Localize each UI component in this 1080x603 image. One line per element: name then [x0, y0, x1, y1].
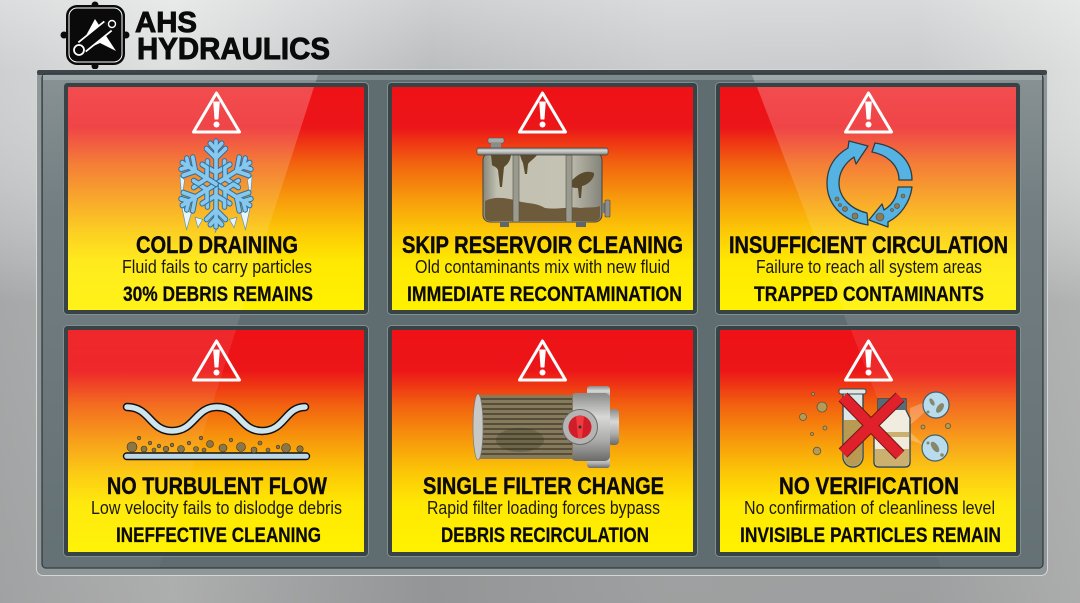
consequence: TRAPPED CONTAMINANTS — [754, 283, 984, 306]
heading: NO TURBULENT FLOW — [107, 473, 327, 500]
description: Failure to reach all system areas — [756, 257, 982, 277]
description: Old contaminants mix with new fluid — [415, 257, 670, 277]
panel: skip reservoir cleaning — [388, 82, 698, 314]
icon: warning triangle — [520, 341, 566, 380]
heading: SKIP RESERVOIR CLEANING — [402, 232, 683, 259]
description: Rapid filter loading forces bypass — [427, 498, 660, 518]
heading: COLD DRAINING — [136, 232, 298, 259]
logo wordmark: AHS — [135, 7, 197, 39]
consequence: INEFFECTIVE CLEANING — [116, 524, 321, 547]
heading: SINGLE FILTER CHANGE — [423, 473, 664, 500]
icon: warning triangle — [846, 93, 892, 132]
icon: warning triangle — [194, 341, 240, 380]
icon: clogged filter with bypass gauge — [473, 386, 619, 468]
heading: NO VERIFICATION — [779, 473, 959, 500]
panel: insufficient circulation — [716, 82, 1020, 314]
consequence: DEBRIS RECIRCULATION — [441, 524, 649, 547]
icon: warning triangle — [846, 341, 892, 380]
icon: laminar flow over settled debris — [124, 407, 310, 460]
consequence: 30% DEBRIS REMAINS — [123, 283, 313, 306]
icon: circulation arrows — [827, 141, 912, 227]
description: No confirmation of cleanliness level — [744, 498, 995, 518]
heading: INSUFFICIENT CIRCULATION — [729, 232, 1008, 259]
logo wordmark: HYDRAULICS — [137, 31, 330, 66]
description: Low velocity fails to dislodge debris — [91, 498, 342, 518]
panel: single filter change — [388, 326, 698, 556]
panel: no turbulent flow — [64, 326, 368, 556]
icon: crossed-out sample vials — [800, 389, 951, 467]
icon: hydraulic cylinder badge — [60, 2, 130, 70]
logo: AHS Hydraulics — [60, 2, 330, 70]
panel: no verification — [716, 326, 1020, 556]
consequence: IMMEDIATE RECONTAMINATION — [407, 283, 682, 306]
icon: snowflake — [178, 141, 254, 233]
icon: warning triangle — [194, 93, 240, 132]
steel frame — [36, 69, 1048, 576]
panel: cold draining — [64, 82, 368, 314]
icon: dirty reservoir tank — [477, 138, 610, 227]
logo wordmark — [135, 7, 330, 66]
consequence: INVISIBLE PARTICLES REMAIN — [740, 524, 1001, 547]
description: Fluid fails to carry particles — [122, 257, 312, 277]
icon: warning triangle — [520, 93, 566, 132]
